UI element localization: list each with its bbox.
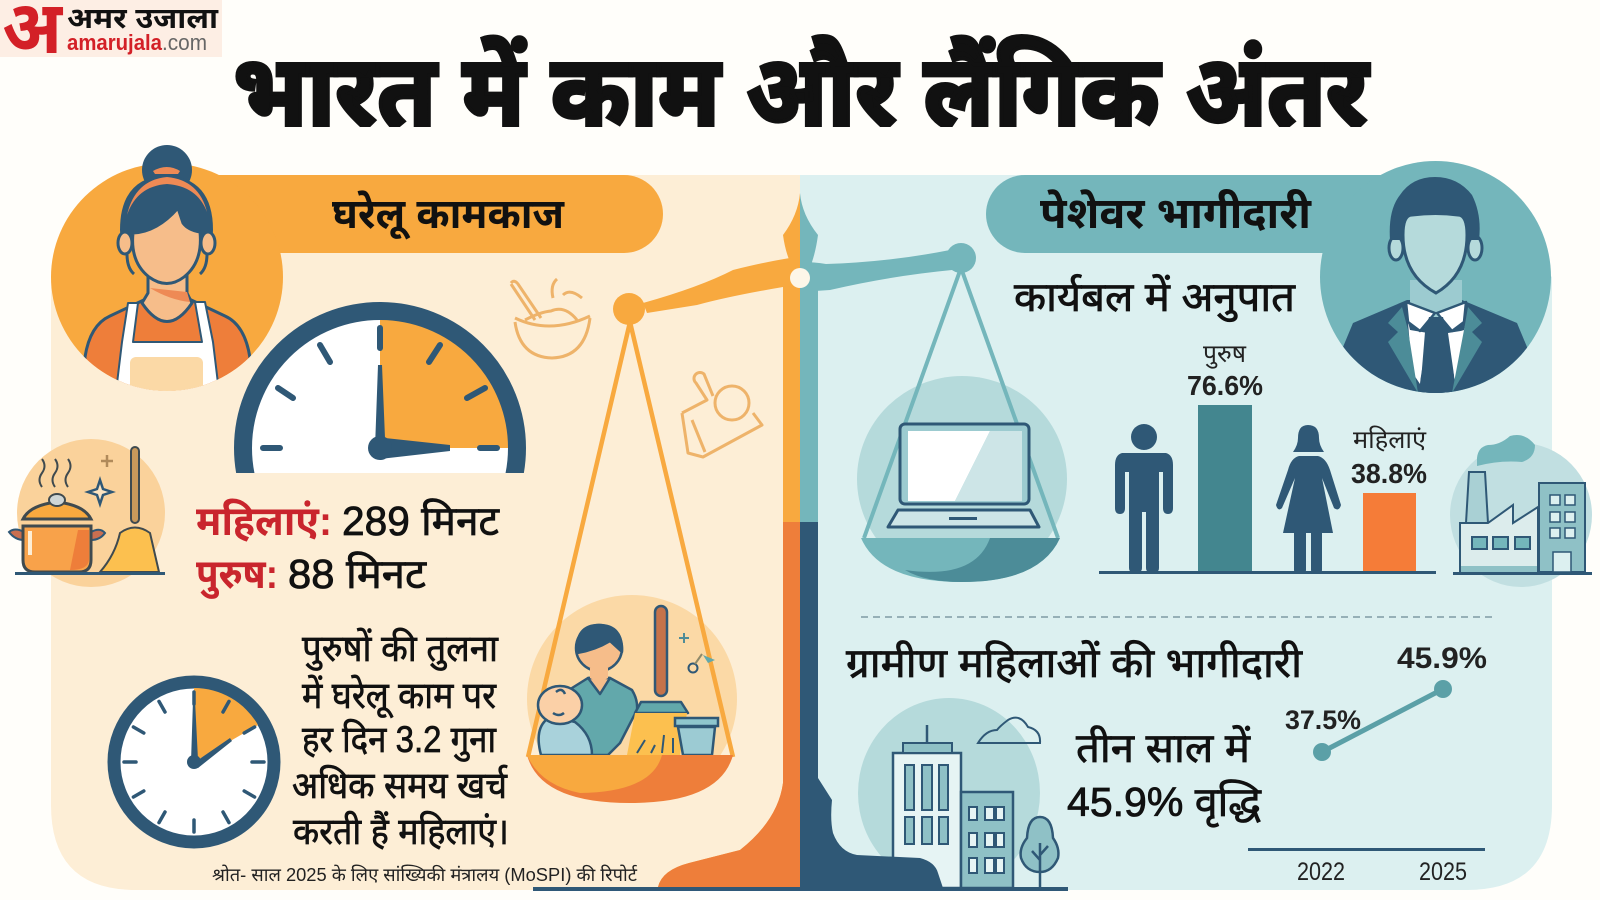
scale post: lower orange [658, 522, 800, 887]
scale post: teal side [800, 193, 818, 522]
pivot [790, 268, 810, 288]
icon: factory [1450, 435, 1592, 587]
heading: rural women participation: ग्रामीण महिलाओं की भागीदारी [846, 640, 1303, 686]
icon: man portrait [1320, 161, 1551, 400]
bar: men [1198, 405, 1252, 572]
line chart: rural participation [1248, 642, 1487, 886]
callout: three-year growth: 45.9% वृद्धि [1067, 779, 1262, 827]
icon: man figure [1115, 424, 1173, 572]
source note: श्रोत- साल 2025 के लिए सांख्यिकी मंत्रालय (MoSPI) की रिपोर्ट [212, 864, 638, 885]
right beam [800, 250, 952, 292]
value 2022: 37.5% [1285, 705, 1361, 735]
logo: amarujala [67, 30, 163, 55]
callout: three-year growth: तीन साल में [1076, 725, 1252, 771]
stat: men minutes: पुरुष: [196, 551, 278, 599]
bar: women [1363, 493, 1416, 572]
text block: comparison note: में घरेलू काम पर [302, 674, 497, 718]
icon: woman figure [1276, 425, 1341, 572]
scale base line [533, 887, 1068, 891]
axis [1099, 571, 1436, 574]
value: women: 38.8% [1351, 458, 1427, 489]
icon: laptop [888, 424, 1039, 527]
icon: baby [538, 686, 592, 755]
icon: chopping board and magnifier [682, 372, 762, 457]
text block: comparison note: करती हैं महिलाएं। [293, 810, 509, 852]
axis [1248, 848, 1485, 851]
icon: woman portrait [51, 145, 283, 407]
icon: bucket [675, 718, 718, 755]
callout: three-year growth [1067, 725, 1262, 827]
pan [527, 755, 733, 803]
value: men: 76.6% [1187, 370, 1263, 401]
icon: city buildings [858, 698, 1058, 889]
value 2025: 45.9% [1397, 642, 1487, 675]
header bar: household work: घरेलू कामकाज [332, 190, 565, 240]
text block: comparison note: हर दिन 3.2 गुना [302, 719, 497, 762]
year 2025: 2025 [1419, 858, 1467, 886]
chart: big clock 289 minutes [234, 302, 526, 473]
header bar: household work [170, 175, 663, 253]
stat: women minutes: महिलाएं: [196, 498, 332, 544]
icon: parent [572, 625, 637, 755]
scale base: dark right side [800, 522, 943, 888]
left scale pan with caregiver [527, 322, 737, 803]
text block: comparison note: अधिक समय खर्च [292, 764, 508, 806]
stat: women minutes: 289 मिनट [342, 498, 500, 544]
icon: bowl [511, 279, 590, 358]
heading: workforce ratio: कार्यबल में अनुपात [1014, 274, 1296, 322]
balance scale: post and beam [613, 193, 976, 887]
sparkle [679, 633, 715, 672]
label: women: महिलाएं [1353, 425, 1427, 454]
left beam [643, 258, 800, 313]
stat: men minutes: 88 मिनट [288, 551, 427, 597]
panel: professional participation background [800, 175, 1552, 890]
chart: small clock [114, 682, 274, 842]
text block: comparison note: पुरुषों की तुलना [302, 627, 499, 671]
header bar: professional participation: पेशेवर भागीदारी [1040, 189, 1312, 238]
scale post: orange side [658, 193, 800, 887]
left knob [613, 293, 645, 325]
icon: broom [627, 606, 688, 755]
stat: women minutes [196, 498, 500, 544]
pan [861, 538, 1060, 582]
icon: pot and broom [9, 439, 165, 587]
panel: household work background [51, 175, 800, 890]
logo: .com [162, 30, 207, 55]
title: भारत में काम और लैंगिक अंतर [233, 36, 1370, 149]
bar chart: workforce ratio [1099, 340, 1436, 574]
text block: comparison note [292, 627, 509, 852]
stat: men minutes [196, 551, 427, 599]
label: men: पुरुष [1203, 340, 1247, 369]
year 2022: 2022 [1297, 858, 1345, 886]
header bar: professional participation [986, 175, 1400, 253]
logo: अमर उजाला [67, 3, 218, 35]
logo [0, 0, 222, 69]
right scale pan with laptop [857, 268, 1067, 582]
right knob [946, 243, 976, 273]
